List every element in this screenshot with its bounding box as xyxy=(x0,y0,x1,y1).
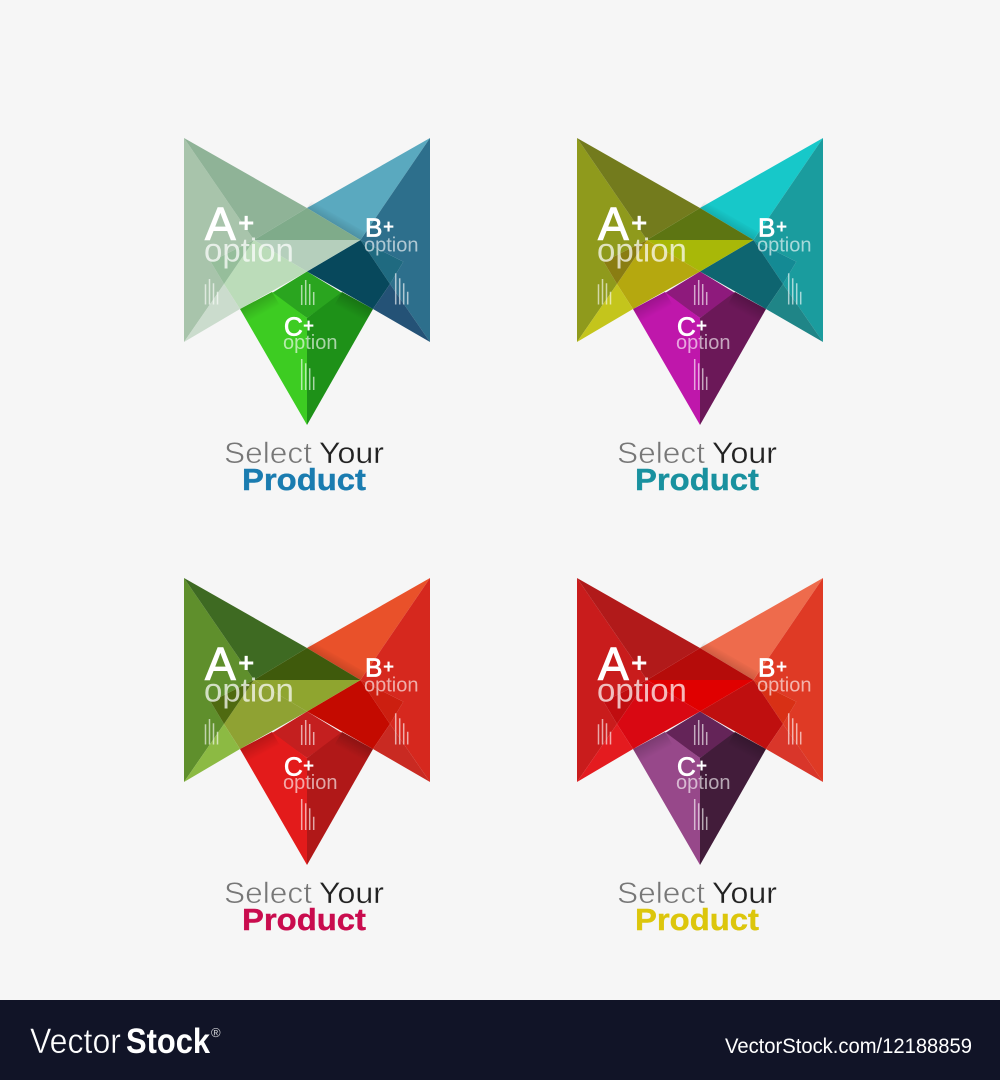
label A+ option xyxy=(204,198,294,304)
label C+ option xyxy=(283,280,338,390)
footer logo: ® xyxy=(211,1025,221,1040)
heading: Product xyxy=(242,902,366,937)
triangle A xyxy=(577,138,754,342)
label A+ option: + xyxy=(631,207,647,238)
heading xyxy=(617,877,777,937)
label B+ option xyxy=(364,653,418,744)
triangle A xyxy=(184,578,360,782)
label C+ option: + xyxy=(303,316,314,337)
heading: Select xyxy=(617,437,706,470)
heading: Product xyxy=(635,462,759,497)
heading xyxy=(224,877,384,937)
triangle A xyxy=(184,138,360,342)
heading: Your xyxy=(319,437,384,470)
heading: Product xyxy=(242,462,366,497)
heading: Select xyxy=(617,877,706,910)
label C+ option: + xyxy=(696,316,707,337)
heading: Select xyxy=(224,877,313,910)
heading: Your xyxy=(319,877,384,910)
label A+ option: A xyxy=(205,638,236,690)
footer logo xyxy=(30,1022,221,1061)
label B+ option: + xyxy=(776,657,787,678)
label C+ option: C xyxy=(284,312,303,342)
label B+ option: + xyxy=(776,217,787,238)
heading: Your xyxy=(712,877,777,910)
label B+ option: B xyxy=(758,213,775,243)
label A+ option xyxy=(597,638,687,744)
label A+ option xyxy=(597,198,687,304)
label B+ option: B xyxy=(365,653,382,683)
label C+ option xyxy=(676,720,730,830)
footer logo: Stock xyxy=(126,1022,210,1061)
label B+ option xyxy=(757,213,812,304)
label B+ option xyxy=(364,213,418,304)
label A+ option: + xyxy=(238,207,254,238)
triangle C xyxy=(240,272,373,425)
label B+ option: + xyxy=(383,217,394,238)
footer image id: VectorStock.com/12188859 xyxy=(725,1035,972,1058)
panel: top-right olive and teal options xyxy=(577,138,823,497)
heading xyxy=(224,437,384,497)
label A+ option: + xyxy=(238,647,254,678)
label C+ option: + xyxy=(303,756,314,777)
heading: Select xyxy=(224,437,313,470)
label C+ option: + xyxy=(696,756,707,777)
label A+ option: option xyxy=(204,672,294,709)
label A+ option: A xyxy=(598,638,629,690)
heading: Product xyxy=(635,902,759,937)
panel: bottom-left green and red options xyxy=(184,578,430,937)
footer bar xyxy=(0,1000,1000,1080)
label C+ option xyxy=(676,280,730,390)
label A+ option: + xyxy=(631,647,647,678)
label B+ option: + xyxy=(383,657,394,678)
label C+ option: C xyxy=(677,752,696,782)
triangle C xyxy=(633,712,766,865)
label C+ option: option xyxy=(283,332,338,354)
label B+ option: B xyxy=(758,653,775,683)
footer logo: Vector xyxy=(30,1022,121,1061)
heading xyxy=(617,437,777,497)
triangle B xyxy=(307,578,430,782)
label C+ option: option xyxy=(676,332,730,354)
triangle B xyxy=(307,138,430,342)
triangle C xyxy=(633,272,766,425)
triangle B xyxy=(700,578,823,782)
label B+ option: option xyxy=(364,235,418,257)
label B+ option: option xyxy=(757,675,812,697)
heading: Your xyxy=(712,437,777,470)
label A+ option: option xyxy=(597,232,687,269)
label B+ option: B xyxy=(365,213,382,243)
triangle B xyxy=(700,138,823,342)
triangle C xyxy=(240,712,373,865)
label B+ option: option xyxy=(364,675,418,697)
label A+ option: option xyxy=(597,672,687,709)
label A+ option xyxy=(204,638,294,744)
panel: top-left green and blue options xyxy=(184,138,430,497)
label A+ option: option xyxy=(204,232,294,269)
label C+ option: option xyxy=(283,772,338,794)
label A+ option: A xyxy=(598,198,629,250)
label A+ option: A xyxy=(205,198,236,250)
label C+ option: C xyxy=(284,752,303,782)
label B+ option xyxy=(757,653,812,744)
label C+ option: C xyxy=(677,312,696,342)
label B+ option: option xyxy=(757,235,812,257)
panel: bottom-right red and purple options xyxy=(577,578,823,937)
triangle A xyxy=(577,578,754,782)
label C+ option xyxy=(283,720,338,830)
label C+ option: option xyxy=(676,772,730,794)
